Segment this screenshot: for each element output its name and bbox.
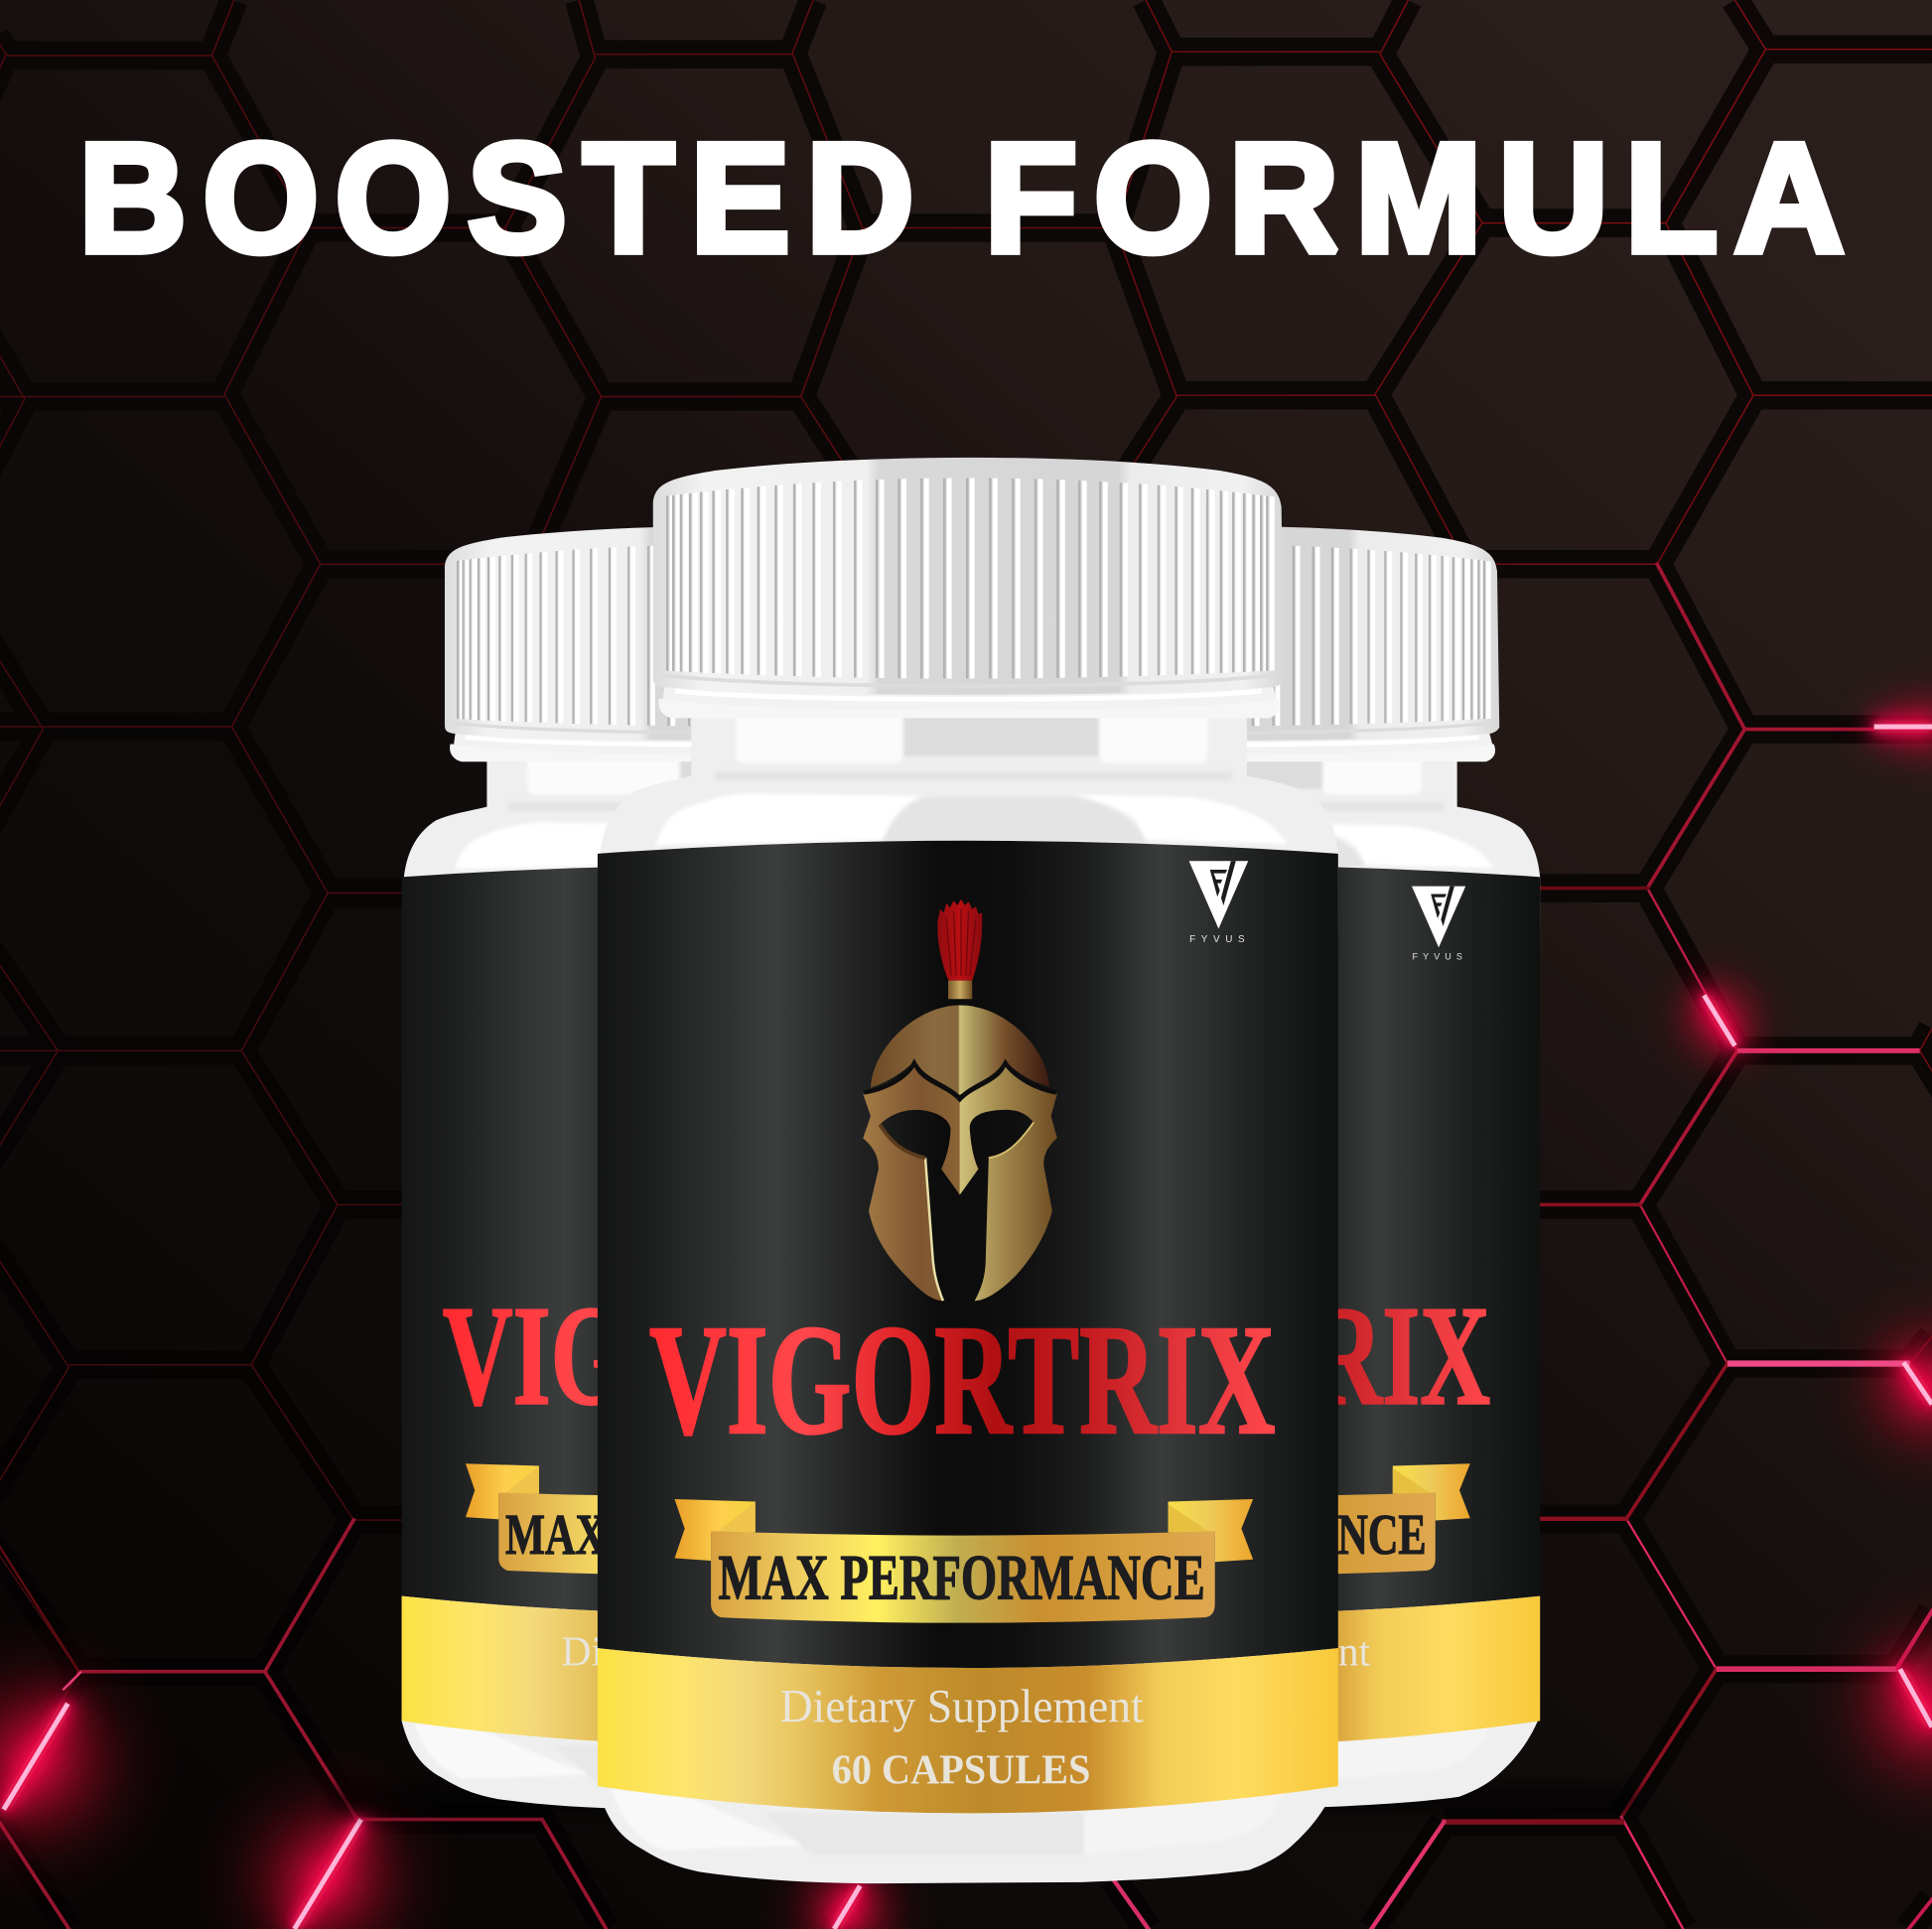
label: black panel	[598, 841, 1338, 1668]
floor shadow under bottles	[333, 1789, 1639, 1808]
bottle: back right: 60 CAPSULES	[1087, 1689, 1322, 1730]
bottle: back left: MAX PERFORMANCE	[505, 1502, 948, 1567]
capsule count: 60 CAPSULES	[832, 1747, 1090, 1794]
label: gold band	[598, 1648, 1338, 1813]
supplement label text: Dietary Supplement	[780, 1682, 1144, 1733]
bottle: back right: Dietary Supplement	[1039, 1629, 1370, 1675]
banner text: MAX PERFORMANCE	[719, 1542, 1205, 1612]
bottle: back right	[866, 526, 1540, 1809]
ribbon banner	[674, 1499, 1253, 1623]
bright pink hex edges with neon glow	[4, 727, 1932, 1929]
bottle: front	[598, 458, 1338, 1883]
icon: spartan helmet	[863, 899, 1057, 1301]
title: FORMULA	[985, 111, 1845, 284]
bottle: back left: FYVUS	[934, 952, 989, 962]
bottle: back left: Dietary Supplement	[562, 1629, 893, 1675]
bottle: back right: VIGORTRIX	[920, 1278, 1490, 1436]
medium red hex edges	[0, 564, 1932, 1929]
title: BOOSTED	[78, 111, 914, 285]
icon: FYVUS logo	[1189, 861, 1248, 929]
logo wordmark: FYVUS	[1189, 934, 1250, 945]
bottle: back right: MAX PERFORMANCE	[984, 1502, 1427, 1567]
brand name: VIGORTRIX	[649, 1293, 1276, 1467]
title	[78, 111, 1845, 285]
bottle: back left: VIGORTRIX	[443, 1278, 1013, 1436]
bottle: back left	[402, 526, 1075, 1809]
bottle: back right: FYVUS	[1413, 952, 1467, 962]
red glow halos	[0, 653, 1932, 1929]
bottle body	[598, 701, 1338, 1883]
ribbed cap	[653, 458, 1284, 718]
bottle: back left: 60 CAPSULES	[609, 1689, 844, 1730]
